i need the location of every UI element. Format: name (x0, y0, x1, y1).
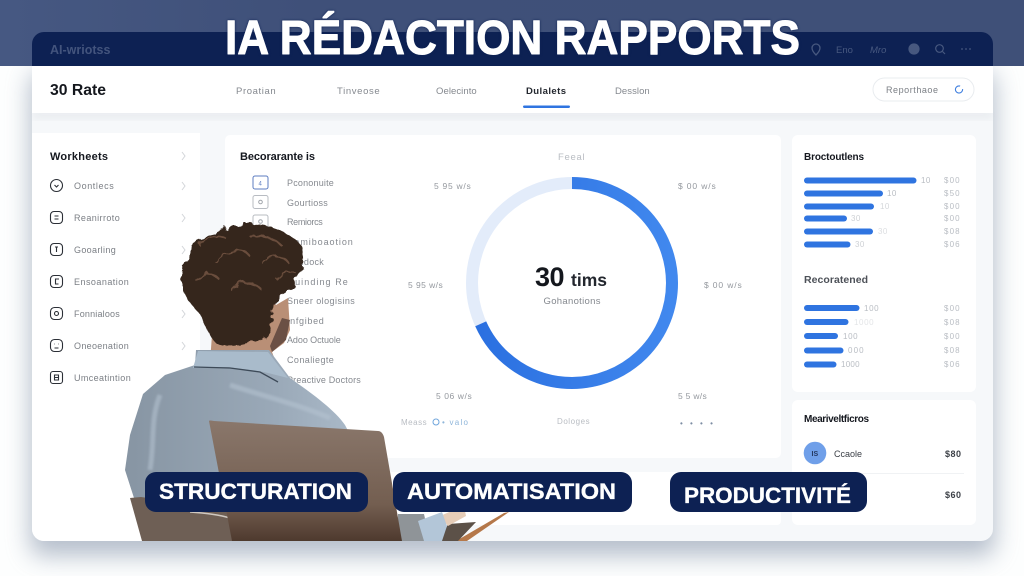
top bar chart: 10 (887, 189, 897, 198)
shaded neck side (270, 318, 290, 352)
navigation shadow (32, 110, 993, 119)
tab: Tinveose: Tinveose (337, 86, 380, 97)
donut callouts: $ 00 w/s (678, 181, 716, 191)
donut callouts: $ 00 w/s (704, 280, 742, 290)
legend right: • • • • (680, 419, 715, 428)
sidebar row 7 (50, 372, 131, 384)
second bar chart: $08 (944, 318, 960, 327)
header link two: Mro (870, 45, 886, 56)
report item list: Conaliegte (287, 355, 334, 365)
brand heading: 30 Rate (50, 82, 106, 99)
donut callouts: 5 5 w/s (678, 391, 707, 401)
top bar chart: 30 (851, 214, 861, 223)
legend left (401, 418, 469, 427)
donut caption: Gohanotions (544, 296, 601, 307)
donut chart (472, 183, 672, 383)
table surface (440, 522, 476, 541)
list icon 1 (253, 176, 268, 189)
second bar chart: 100 (843, 332, 858, 341)
sidebar background (32, 133, 200, 541)
chair (130, 497, 233, 541)
nav background (32, 66, 993, 113)
second bar chart: $00 (944, 332, 960, 341)
shirt fold (150, 385, 330, 470)
top bar chart: 30 (855, 240, 865, 249)
list icon 1: 4 (258, 182, 262, 188)
label: structuration (145, 472, 368, 512)
sidebar chevrons (182, 152, 185, 350)
chart title: Feeal (558, 152, 585, 163)
panel: worksheets sidebar (32, 133, 200, 541)
second bar chart: 100 (864, 304, 879, 313)
top bar chart: 10 (880, 202, 890, 211)
icon: more menu (961, 48, 971, 50)
list icon 3 (253, 215, 268, 228)
collar shadow line (194, 367, 278, 382)
panel: metrics list (792, 400, 976, 525)
metric name: Ccaole (834, 449, 862, 459)
title: IA RÉDACTION RAPPORTS (225, 10, 800, 64)
metric avatar (804, 442, 826, 464)
keyboard (398, 514, 430, 541)
donut callouts (408, 181, 742, 401)
sidebar row 3 (50, 244, 116, 256)
report item list: Preactive Doctors (287, 375, 361, 385)
second bar chart: 1000 (854, 318, 874, 327)
report button (873, 78, 974, 101)
report item list: Sneer ologisins (287, 296, 355, 306)
label: structuration: STRUCTURATION (159, 479, 352, 504)
hair (181, 224, 305, 346)
top bar chart: $00 (944, 176, 960, 185)
chair highlight (190, 512, 230, 518)
hair curls (196, 235, 294, 290)
header bar content (50, 43, 971, 57)
list icon 2 (253, 196, 268, 208)
top title band (0, 0, 1024, 66)
report item list: Infgibed (287, 316, 324, 326)
top bar chart: $06 (944, 240, 960, 249)
metric value one: $80 (945, 449, 961, 459)
top bar chart: $00 (944, 202, 960, 211)
sidebar row 5: Fonnialoos (74, 309, 120, 319)
window body (32, 66, 993, 541)
report item list: Bandock (287, 257, 324, 267)
tab: Desslon: Desslon (615, 86, 650, 97)
sidebar row 2: Reanirroto (74, 213, 120, 223)
shirt (125, 350, 400, 530)
second bar chart: $00 (944, 304, 960, 313)
metric avatar: IS (812, 451, 818, 458)
donut track (472, 183, 672, 383)
metric divider (804, 473, 964, 474)
sidebar row 7: Umceatintion (74, 373, 131, 383)
panel background (792, 400, 976, 525)
sidebar row 4 (50, 276, 129, 288)
top bar chart: $00 (944, 214, 960, 223)
report item list (287, 178, 361, 385)
sidebar row 3: Gooarling (74, 245, 116, 255)
sidebar row 1: Oontlecs (74, 181, 114, 191)
top bar chart: $08 (944, 227, 960, 236)
second bar chart: $08 (944, 346, 960, 355)
icon: avatar (908, 43, 920, 55)
legend left: • valo (442, 418, 469, 427)
sidebar row 2 (50, 212, 120, 224)
report item list: Namiboaotion (287, 237, 353, 247)
sidebar row 6 (50, 340, 129, 352)
sidebar row 6: Oneoenation (74, 341, 129, 351)
tab: active: Dulalets (526, 86, 566, 97)
second heading: Recoratened (804, 274, 868, 286)
top bar chart (804, 176, 960, 249)
panel heading: Broctoutlens (804, 152, 864, 163)
top bar chart: 10 (921, 176, 931, 185)
tab: Proatian: Proatian (236, 86, 276, 97)
report button: Reporthaoe (886, 85, 938, 95)
label: productivité: PRODUCTIVITÉ (684, 483, 851, 508)
report item list: Adoo Octuole (287, 335, 341, 345)
panel heading: Meariveltficros (804, 414, 869, 425)
panel: main report (225, 135, 781, 525)
report item list: Pcononuite (287, 178, 334, 188)
navigation bar (32, 66, 993, 113)
active tab underline (523, 106, 570, 108)
lower strip panel (225, 472, 781, 525)
report item list: Remiorcs (287, 217, 323, 227)
card shadow (30, 72, 995, 556)
donut centre value: 30 (535, 262, 564, 292)
main panel background (225, 135, 781, 458)
metric value two: $60 (945, 490, 961, 500)
second bar chart: 000 (848, 346, 864, 355)
header link one: Eno (836, 45, 853, 56)
table edge (456, 512, 509, 541)
sidebar row 5 (50, 308, 120, 320)
donut callouts: 5 95 w/s (408, 280, 443, 290)
donut centre unit: tims (571, 270, 607, 290)
top bar chart: 30 (878, 227, 888, 236)
sleeve (418, 512, 447, 541)
main panel heading: Becorarante is (240, 151, 315, 163)
donut value arc (472, 183, 672, 383)
legend left: Meass (401, 418, 427, 427)
shirt collar (193, 351, 288, 378)
icon: location pin (812, 44, 820, 55)
top bar chart: $50 (944, 189, 960, 198)
sidebar row 4: Ensoanation (74, 277, 129, 287)
report item list: Gourtioss (287, 198, 328, 208)
second bar chart: $06 (944, 360, 960, 369)
report item list: Guinding Re (287, 277, 348, 287)
sidebar row 1 (50, 180, 114, 192)
person at laptop (125, 224, 509, 541)
window title bar (32, 32, 993, 66)
label: automatisation (393, 472, 632, 512)
app name: AI-wriotss (50, 43, 110, 57)
legend centre: Dologes (557, 417, 590, 426)
tab: Oelecinto: Oelecinto (436, 86, 477, 97)
laptop (209, 420, 402, 541)
sidebar heading: Workheets (50, 151, 108, 163)
neck and ear (210, 296, 290, 368)
panel: breakdown bars (792, 135, 976, 392)
label: productivité (670, 472, 867, 512)
icon: search (936, 45, 945, 54)
label: automatisation: AUTOMATISATION (407, 479, 616, 504)
second bar chart (804, 304, 960, 369)
panel background (792, 135, 976, 392)
second bar chart: 1000 (841, 360, 860, 369)
donut callouts: 5 95 w/s (434, 181, 471, 191)
hand (440, 510, 466, 526)
donut callouts: 5 06 w/s (436, 391, 472, 401)
